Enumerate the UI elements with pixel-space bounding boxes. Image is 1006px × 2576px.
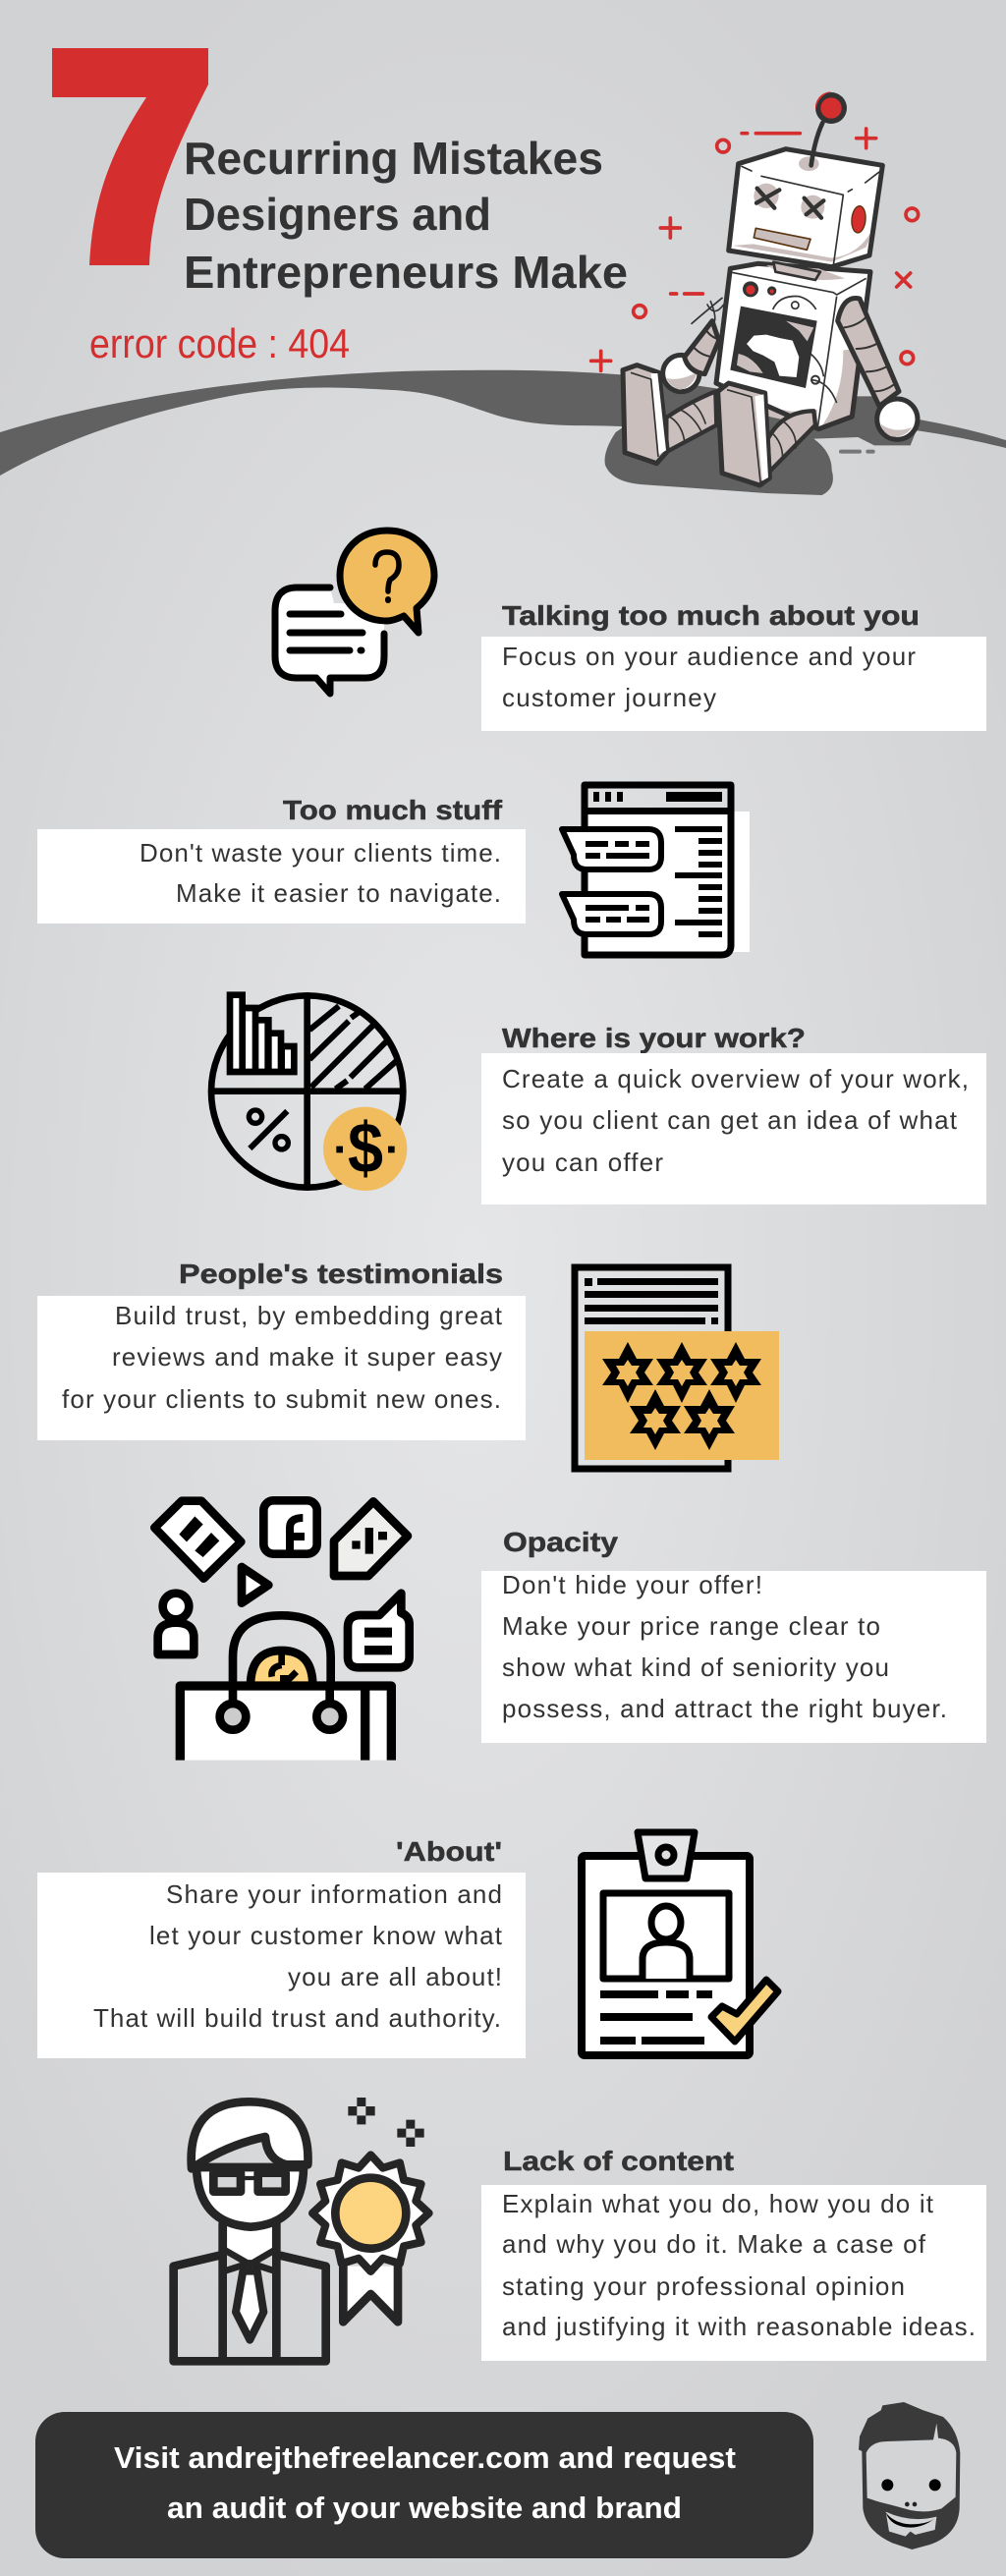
text panel — [481, 637, 986, 731]
text panel: let your customer know what — [149, 1921, 503, 1950]
icon: expert with award rosette — [174, 2098, 429, 2361]
text panel: and why you do it. Make a case of — [502, 2229, 926, 2259]
text panel: show what kind of seniority you — [502, 1652, 889, 1682]
percent symbol — [249, 1110, 288, 1149]
text panel: and justifying it with reasonable ideas. — [502, 2312, 976, 2341]
icon: bearded face avatar — [859, 2402, 960, 2549]
robot ground shadow — [605, 396, 917, 495]
title: Recurring Mistakes — [184, 133, 603, 184]
text panel: Create a quick overview of your work, — [502, 1064, 969, 1093]
item 7: lack of content — [174, 2098, 986, 2361]
icon: shopping bag with tags — [154, 1500, 410, 1761]
text panel — [37, 1873, 526, 2058]
item 5: opacity — [154, 1500, 986, 1761]
text panel: customer journey — [502, 683, 716, 712]
text panel — [481, 2185, 986, 2361]
text panel — [37, 829, 526, 924]
text panel: you can offer — [502, 1148, 663, 1177]
robot feet — [623, 365, 769, 485]
text panel — [481, 1053, 986, 1204]
heading: Talking too much about you — [502, 600, 920, 631]
text panel — [37, 1296, 526, 1440]
title — [184, 133, 628, 298]
item 3: where is your work — [211, 991, 986, 1204]
text panel: Explain what you do, how you do it — [502, 2189, 934, 2218]
big number 7 — [52, 48, 208, 265]
robot legs — [666, 391, 815, 472]
heading: 'About' — [396, 1836, 502, 1867]
icon: pie chart with coin — [211, 991, 407, 1191]
icon: speech bubbles with question mark — [275, 531, 434, 694]
item 2: too much stuff — [37, 785, 750, 955]
call to action banner: an audit of your website and brand — [167, 2491, 682, 2525]
text panel: so you client can get an idea of what — [502, 1105, 958, 1135]
gray dash marks — [841, 446, 873, 458]
text panel: That will build trust and authority. — [93, 2003, 501, 2033]
header wave band — [0, 370, 1006, 476]
heading: Opacity — [503, 1527, 618, 1557]
item 4: people's testimonials — [37, 1259, 779, 1469]
robot right arm — [838, 298, 918, 439]
robot left arm — [663, 298, 724, 392]
text panel: for your clients to submit new ones. — [62, 1384, 501, 1414]
robot head — [729, 91, 882, 267]
text panel: stating your professional opinion — [502, 2271, 905, 2301]
item 1: talking too much about you — [275, 531, 986, 731]
text panel: Share your information and — [166, 1879, 502, 1909]
text panel: Build trust, by embedding great — [115, 1301, 503, 1330]
heading: Lack of content — [503, 2146, 734, 2176]
call to action banner: Visit andrejthefreelancer.com and request — [114, 2440, 736, 2475]
robot chest screen with gear — [730, 307, 817, 388]
red spark marks — [591, 129, 919, 370]
illustration: broken robot — [591, 91, 919, 495]
text panel: Don't hide your offer! — [502, 1570, 762, 1599]
text panel: Don't waste your clients time. — [140, 838, 501, 868]
item 6: about — [37, 1832, 778, 2058]
text panel: Make your price range clear to — [502, 1611, 880, 1641]
icon: web page with chat bubbles — [562, 785, 750, 955]
icon: review document with stars — [575, 1267, 779, 1469]
robot torso — [716, 263, 870, 429]
text panel — [481, 1570, 986, 1743]
title: Designers and — [184, 189, 491, 240]
sparkle marks — [348, 2098, 424, 2147]
text panel: reviews and make it super easy — [112, 1342, 502, 1372]
text panel: Focus on your audience and your — [502, 642, 916, 671]
call to action banner — [35, 2412, 813, 2558]
dollar sign: $ — [348, 1109, 383, 1188]
heading: Where is your work? — [502, 1023, 806, 1053]
subtitle: error code: error code : 404 — [89, 320, 350, 366]
text panel: possess, and attract the right buyer. — [502, 1694, 947, 1723]
heading: Too much stuff — [283, 795, 503, 825]
heading: People's testimonials — [179, 1259, 503, 1289]
text panel: Make it easier to navigate. — [176, 878, 501, 908]
text panel: you are all about! — [288, 1962, 502, 1991]
title: Entrepreneurs Make — [184, 247, 628, 298]
robot neck — [773, 262, 820, 280]
icon: ID badge with check — [582, 1832, 778, 2055]
